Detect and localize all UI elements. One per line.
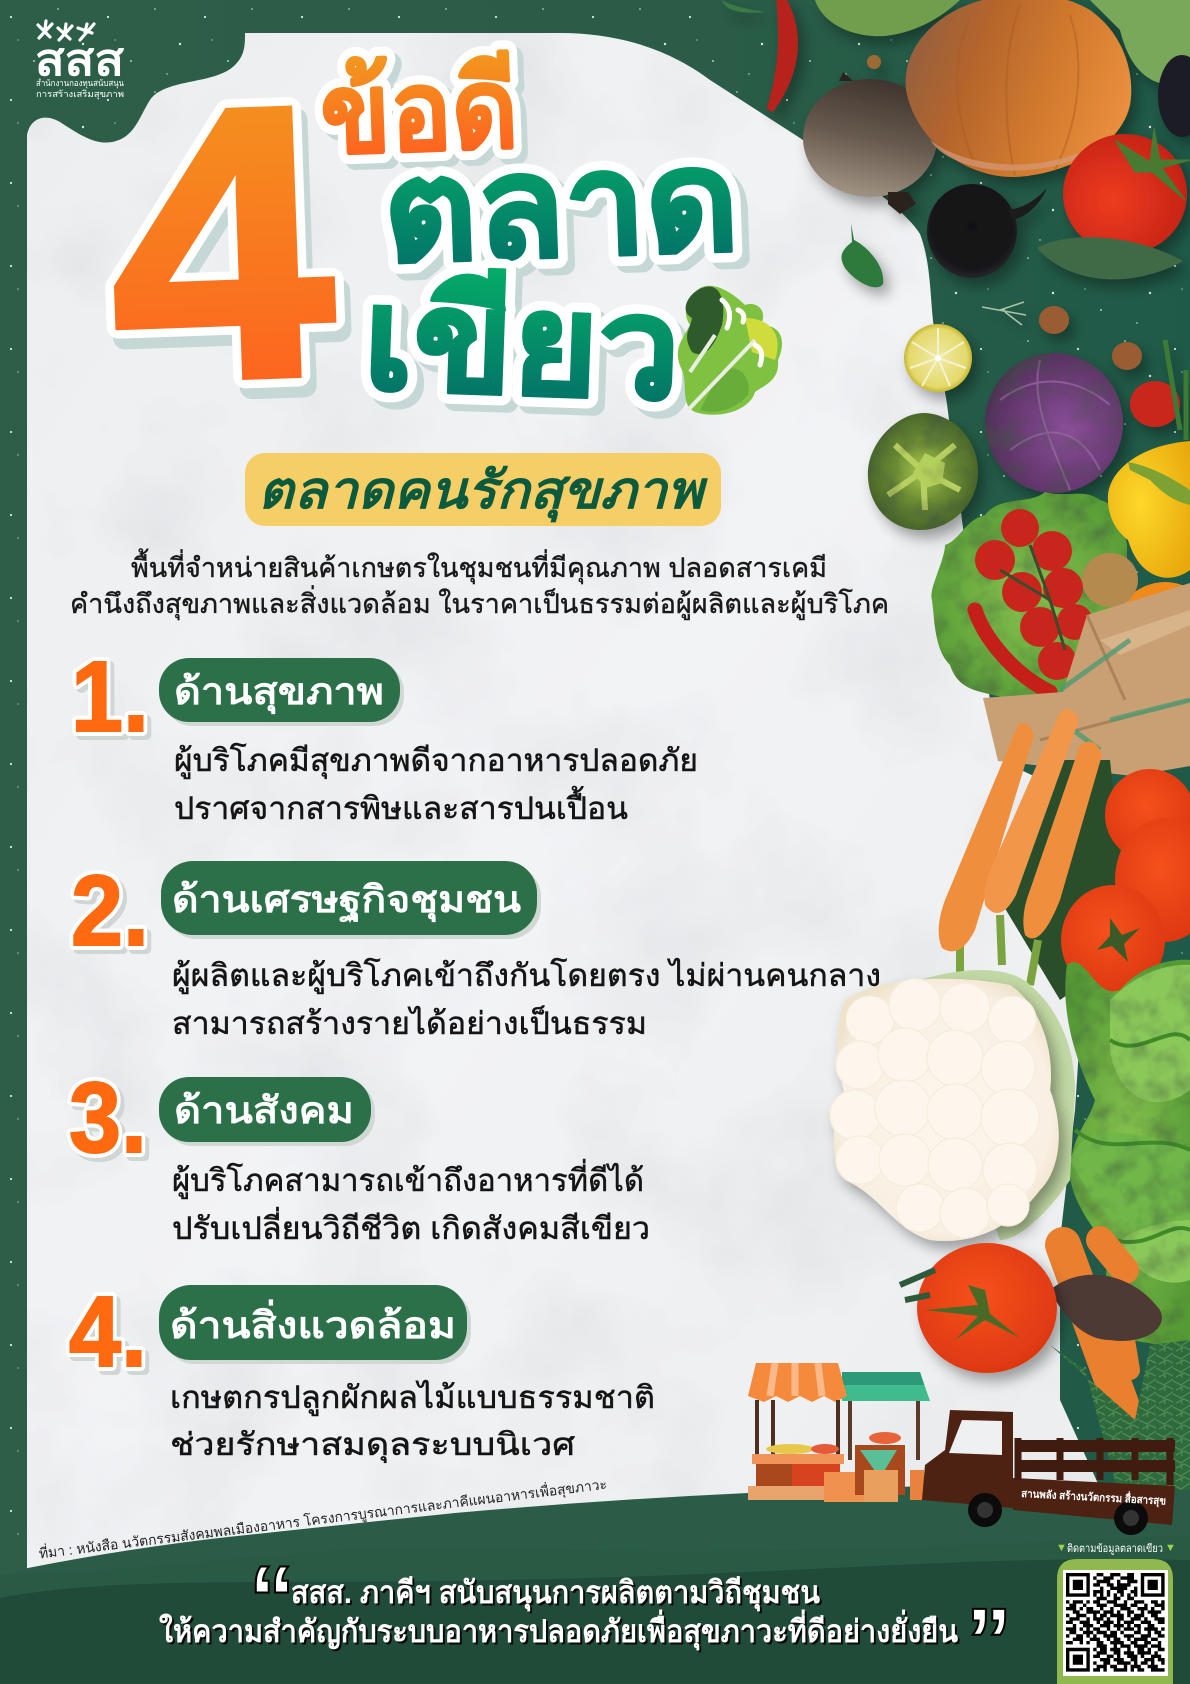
- number 1: 1.: [75, 645, 153, 757]
- hazelnut: [1039, 306, 1069, 334]
- fern: [900, 1270, 935, 1300]
- dill sprig: [982, 302, 1026, 325]
- title word: ข้อดี: ข้อดี: [319, 46, 520, 177]
- body text: ผู้ผลิตและผู้บริโภคเข้าถึงกันโดยตรง ไม่ผ่านคนกลาง: [172, 958, 881, 994]
- body text: สามารถสร้างรายได้อย่างเป็นธรรม: [172, 1005, 647, 1041]
- bay leaf: [1037, 237, 1183, 279]
- number 3: 3.: [73, 1066, 151, 1178]
- quote text shadow: สสส. ภาคีฯ สนับสนุนการผลิตตามวิถีชุมชน: [293, 1577, 822, 1614]
- logo: การสร้างเสริมสุขภาพ: [36, 89, 124, 100]
- purple cabbage: [985, 353, 1123, 493]
- carrots: [939, 709, 1102, 985]
- cherry tomato: [1130, 381, 1180, 427]
- title word: เขียว: เขียว: [361, 260, 683, 430]
- QR caption: ▼: [1056, 1542, 1067, 1554]
- title numeral: 4: 4: [103, 24, 342, 463]
- quote text: สสส. ภาคีฯ สนับสนุนการผลิตตามวิถีชุมชน: [291, 1575, 820, 1612]
- tomatoes: [1061, 769, 1190, 995]
- heading pill: ด้านสุขภาพ: [174, 671, 384, 715]
- subtitle badge: ตลาดคนรักสุขภาพ: [258, 462, 708, 523]
- heading pill: ด้านสิ่งแวดล้อม: [170, 1299, 456, 1346]
- opening quote mark: “: [249, 1548, 295, 1650]
- icon: lettuce leaf: [678, 286, 782, 415]
- title numeral: 4: 4: [103, 24, 342, 463]
- vegetables: top cluster: [722, 0, 1190, 530]
- number 3: 3.: [69, 1062, 147, 1174]
- quote text: ให้ความสำคัญกับระบบอาหารปลอดภัยเพื่อสุขภาวะที่ดีอย่างยั่งยืน: [159, 1609, 958, 1651]
- wheel: [1114, 1501, 1148, 1535]
- orange: [1115, 582, 1190, 682]
- heading pill: [159, 1285, 471, 1364]
- truck bed: [1013, 1438, 1175, 1525]
- title word: ตลาด: ตลาด: [381, 121, 741, 292]
- yellow pepper: [1108, 441, 1190, 578]
- heading pill: [159, 658, 404, 726]
- body text: [172, 958, 881, 1041]
- spinach leaf: [841, 223, 883, 287]
- carrot greens: [1000, 760, 1130, 1000]
- intro paragraph: คำนึงถึงสุขภาพและสิ่งแวดล้อม ในราคาเป็นธรรมต่อผู้ผลิตและผู้บริโภค: [70, 585, 889, 621]
- QR caption: ติดตามข้อมูลตลาดเขียว: [1067, 1542, 1163, 1555]
- heading pill: ด้านสังคม: [174, 1090, 354, 1131]
- title numeral: 4: 4: [109, 35, 348, 474]
- body text: ช่วยรักษาสมดุลระบบนิเวศ: [170, 1427, 575, 1464]
- body text: ปรับเปลี่ยนวิถีชีวิต เกิดสังคมสีเขียว: [172, 1207, 650, 1246]
- body text: [174, 743, 698, 826]
- section 3: society: [69, 1062, 650, 1246]
- body text: [172, 1159, 650, 1246]
- hill: mid ground: [0, 1535, 1190, 1684]
- cab window: [949, 1420, 1002, 1455]
- cauliflower: [830, 979, 1059, 1241]
- black radish: [927, 184, 1047, 278]
- vegetables: lower cluster: [830, 709, 1190, 1500]
- number 2: 2.: [71, 855, 149, 967]
- lower carrots: [1063, 1240, 1130, 1415]
- pumpkin: [906, 0, 1131, 177]
- number 2: 2.: [71, 855, 149, 967]
- title word: ตลาด: ตลาด: [388, 128, 748, 299]
- icon: three star figures: [38, 21, 94, 40]
- produce counter: [748, 1432, 924, 1502]
- heading pill: [161, 861, 541, 939]
- title word: เขียว: เขียว: [361, 260, 683, 430]
- logo: [35, 21, 124, 100]
- number 4: 4.: [69, 1276, 147, 1388]
- quote: [159, 1548, 1012, 1684]
- avocado and chili at top edge: [722, 0, 1190, 137]
- quote text shadow: ให้ความสำคัญกับระบบอาหารปลอดภัยเพื่อสุขภาวะที่ดีอย่างยั่งยืน: [161, 1611, 960, 1653]
- cherry tomatoes: [975, 509, 1128, 680]
- body text: [170, 1380, 655, 1464]
- body text: ผู้บริโภคสามารถเข้าถึงอาหารที่ดีได้: [172, 1159, 644, 1199]
- number 4: 4.: [69, 1276, 147, 1388]
- orange awning stall: [748, 1363, 847, 1460]
- walnut: [1082, 553, 1138, 607]
- cauliflower leaves: [905, 970, 1075, 1240]
- QR card: [1057, 1559, 1173, 1684]
- number 2: 2.: [75, 859, 153, 971]
- source note on curve: ที่มา : หนังสือ นวัตกรรมสังคมพลเมืองอาหาร โครงการบูรณาการและภาคีแผนอาหารเพื่อสุขภาวะ: [38, 1475, 608, 1562]
- logo: สำนักงานกองทุนสนับสนุน: [36, 78, 124, 89]
- QR caption: ▼: [1165, 1542, 1176, 1554]
- big lettuce: [1065, 960, 1190, 1350]
- dill greens: [1050, 1340, 1190, 1500]
- body text: ผู้บริโภคมีสุขภาพดีจากอาหารปลอดภัย: [174, 743, 698, 780]
- body text: ปราศจากสารพิษและสารปนเปื้อน: [174, 786, 628, 826]
- red chili: [975, 610, 1050, 692]
- title word: ตลาด: ตลาด: [381, 121, 741, 292]
- section 2: community economy: [71, 855, 881, 1041]
- heading pill: ด้านเศรษฐกิจชุมชน: [172, 879, 521, 923]
- green awning stall: [842, 1372, 930, 1460]
- lemon slice: [904, 324, 972, 392]
- QR block: [1056, 1542, 1176, 1684]
- vine: [1000, 545, 1065, 650]
- beet: [803, 72, 937, 214]
- title: [103, 24, 782, 474]
- section 4: environment: [69, 1276, 655, 1464]
- QR code: [1066, 1575, 1165, 1670]
- hill: dark ground: [0, 1559, 1190, 1684]
- intro paragraph: พื้นที่จำหน่ายสินค้าเกษตรในชุมชนที่มีคุณภาพ ปลอดสารเคมี: [131, 548, 827, 585]
- title word: ข้อดี: ข้อดี: [325, 51, 526, 183]
- truck cab: [922, 1410, 1013, 1508]
- number 1: 1.: [71, 641, 149, 753]
- green beans: [1165, 340, 1186, 440]
- heading pill: [159, 1077, 375, 1146]
- tomato: [1063, 128, 1190, 254]
- lettuce: [931, 492, 1127, 700]
- number 4: 4.: [73, 1280, 151, 1392]
- truck slogan: สานพลัง สร้างนวัตกรรม สื่อสารสุข: [1021, 1485, 1166, 1509]
- number 3: 3.: [69, 1062, 147, 1174]
- number 1: 1.: [71, 641, 149, 753]
- market stalls: [748, 1363, 930, 1502]
- vegetables: basket: [931, 441, 1190, 776]
- truck: [922, 1410, 1175, 1535]
- intro paragraph: [70, 548, 889, 621]
- QR white square: [1063, 1570, 1168, 1676]
- paper bag: [983, 583, 1190, 776]
- logo: สสส: [35, 36, 124, 85]
- purple leaf: [1050, 1275, 1162, 1341]
- wheel: [968, 1493, 1002, 1527]
- broccoli: [868, 413, 978, 530]
- hazelnut: [1112, 342, 1142, 370]
- bottom tomato: [917, 1243, 1057, 1373]
- quote text: [159, 1575, 958, 1651]
- quote text shadow: [161, 1577, 960, 1653]
- title word: เขียว: เขียว: [368, 267, 690, 437]
- body text: เกษตกรปลูกผักผลไม้แบบธรรมชาติ: [170, 1380, 655, 1416]
- section 1: health: [71, 641, 698, 826]
- title word: ข้อดี: ข้อดี: [319, 46, 520, 177]
- hill: green ground: [0, 1486, 1190, 1684]
